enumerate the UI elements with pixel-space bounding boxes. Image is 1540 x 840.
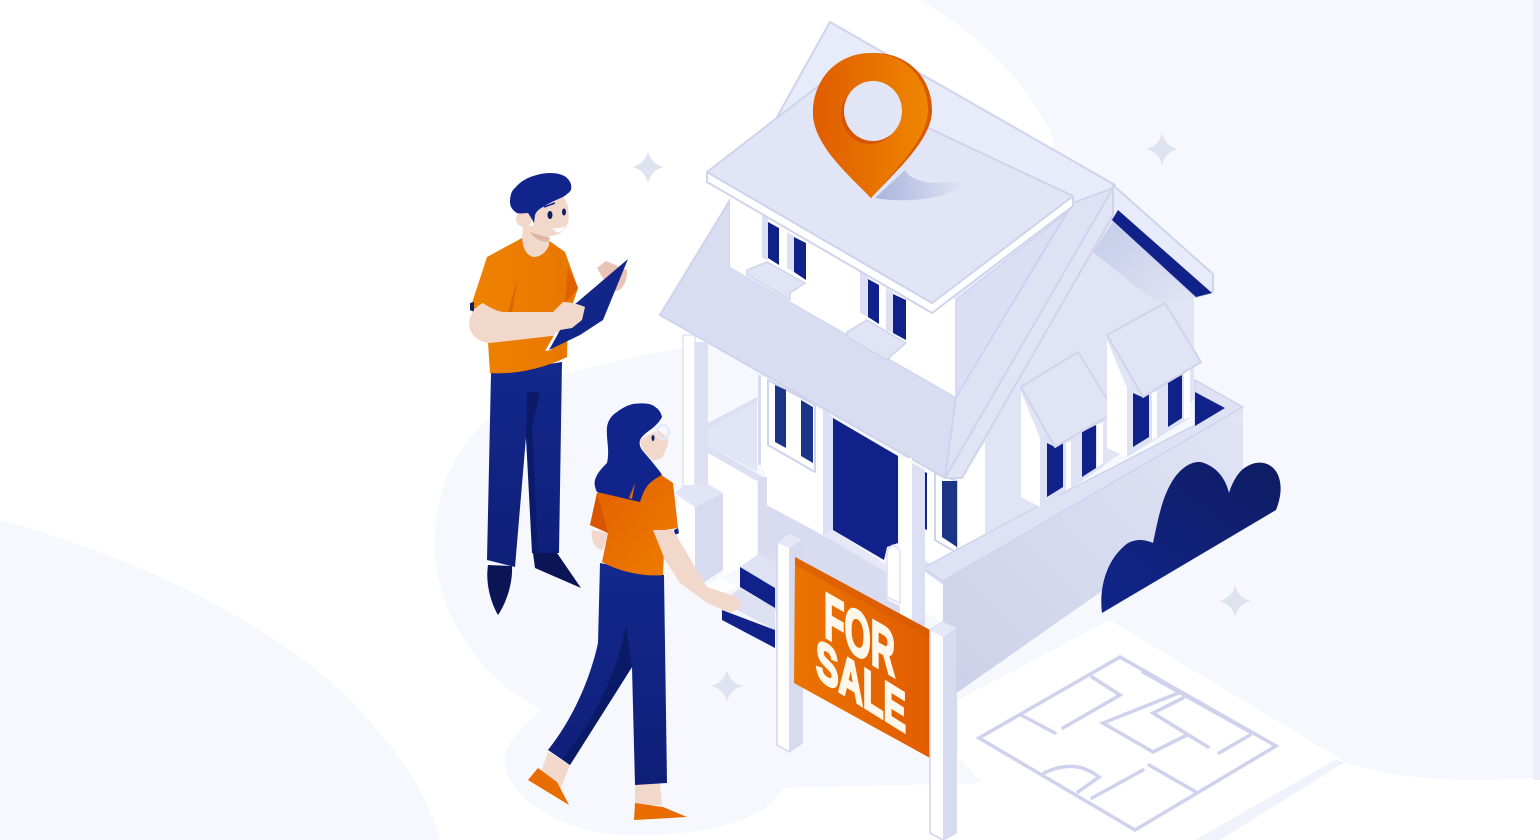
woman hair strand <box>629 483 635 499</box>
wall left strip <box>758 375 761 465</box>
man clipboard <box>549 259 628 350</box>
left dormer pane 1 <box>1047 443 1063 497</box>
man near hand <box>560 302 585 330</box>
pin hole <box>844 81 902 141</box>
navy gable strip <box>1112 210 1212 297</box>
background: right edge strip <box>1533 0 1540 780</box>
upper navy step <box>740 567 775 608</box>
sign text FOR: FOR <box>824 578 895 691</box>
house <box>660 22 1281 692</box>
window pane right <box>942 481 957 547</box>
lavender step <box>722 588 775 630</box>
man neck shadow <box>530 232 550 242</box>
man pants <box>487 362 562 567</box>
woman arm <box>653 530 742 613</box>
woman shirt <box>590 474 678 575</box>
upper wall right side <box>956 213 1066 397</box>
man far hand <box>597 261 627 291</box>
porch inner wall <box>708 402 757 472</box>
left dormer front <box>1040 410 1103 507</box>
right dormer roof <box>1107 303 1201 397</box>
door surround <box>823 405 833 535</box>
woman sleeve fold <box>590 493 608 533</box>
right of column white wall <box>925 442 985 572</box>
man hair <box>510 173 571 223</box>
pedestal right face <box>695 493 723 583</box>
sparkle: right <box>1219 585 1251 617</box>
woman hair <box>595 403 662 502</box>
porch lower white wall <box>708 453 757 577</box>
window sill 2 <box>847 320 906 360</box>
sign post left <box>777 533 802 752</box>
left dormer pane 2 <box>1082 425 1096 477</box>
main right roof slope <box>945 188 1113 478</box>
window frame left pair <box>768 380 815 472</box>
man face <box>533 197 569 236</box>
sparkle: upper left <box>632 151 664 183</box>
right dormer side white <box>1107 340 1127 457</box>
porch rail top <box>708 397 757 430</box>
door right column <box>900 458 912 620</box>
upper window navy 4 <box>893 294 906 340</box>
man sleeve shadow <box>565 267 578 303</box>
woman front shoe <box>634 803 687 820</box>
man with clipboard <box>469 173 628 615</box>
right dormer front <box>1127 362 1190 457</box>
sign text SALE: SALE <box>816 627 906 745</box>
pin body <box>813 53 928 198</box>
left porch column <box>683 335 695 498</box>
right dormer pane 1 <box>1133 393 1149 447</box>
door threshold <box>823 530 887 573</box>
woman glasses <box>657 425 669 439</box>
white floor step <box>705 577 738 593</box>
man pants shadow <box>526 392 540 555</box>
sign post right <box>930 622 956 840</box>
woman back arm <box>592 530 608 550</box>
man neck <box>522 225 550 257</box>
window frame right <box>935 473 957 553</box>
man ear <box>516 211 532 227</box>
window navy left pane <box>775 385 786 448</box>
man far shoe <box>533 553 581 588</box>
woman front foot <box>635 783 662 805</box>
base wall <box>943 407 1243 692</box>
roof edge strip <box>945 188 1113 478</box>
upper window frames <box>762 214 893 333</box>
left dormer white strips <box>1066 422 1103 490</box>
man shirt <box>472 238 578 373</box>
foundation <box>740 477 925 640</box>
front wall <box>760 375 826 537</box>
upper window navy 3 <box>868 279 879 324</box>
porch rail <box>708 445 763 481</box>
back gable roof <box>777 22 1115 360</box>
bush <box>1101 462 1281 613</box>
right dormer white strips <box>1152 370 1190 440</box>
pin inner shadow <box>841 84 899 144</box>
sparkle: upper right <box>1146 133 1178 165</box>
woman pants <box>548 563 667 785</box>
pin dark edge <box>813 53 932 198</box>
man brow <box>544 203 555 207</box>
upper window navy 1 <box>768 222 779 265</box>
door right column side <box>912 463 925 620</box>
upper roof edge <box>707 172 1073 313</box>
woman sleeve bit <box>674 528 679 535</box>
man smile <box>552 226 565 232</box>
window thin pane <box>925 472 927 530</box>
for sale sign <box>794 557 930 758</box>
gable underside shadow <box>1093 218 1194 303</box>
woman pants shadow <box>562 625 632 765</box>
background: bottom-left blob <box>0 520 440 840</box>
left dormer roof <box>1021 352 1115 447</box>
man shirt fold <box>508 277 518 312</box>
lavender top step <box>740 553 777 590</box>
lower navy step <box>722 610 775 648</box>
man arm back bit <box>470 302 474 312</box>
man clipboard white edge <box>545 332 560 351</box>
right dormer pane 2 <box>1168 375 1182 427</box>
base wall rim <box>923 380 1243 581</box>
woman back shoe <box>528 768 569 805</box>
door <box>833 418 898 560</box>
woman back foot <box>540 752 570 795</box>
location pin <box>813 53 966 200</box>
background: floor plan sheet shadow <box>1195 760 1345 840</box>
background: light blob behind house <box>435 0 1533 835</box>
main front roof <box>660 200 956 478</box>
man near shoe <box>487 565 512 615</box>
lower right strip <box>925 547 1000 585</box>
lower right white block <box>925 570 943 622</box>
man eye 2 <box>562 208 566 216</box>
window sill 1 <box>747 262 805 300</box>
window navy right pane <box>801 400 813 463</box>
left dormer side white <box>1021 392 1040 507</box>
upper roof top <box>707 80 1073 303</box>
man eye <box>548 211 552 219</box>
right wing wall <box>943 195 1194 582</box>
floor plan drawing <box>979 657 1276 830</box>
sparkle: lower left <box>711 670 743 702</box>
man arm <box>469 302 574 343</box>
woman eye <box>652 435 654 441</box>
right gable roof edge <box>1112 185 1213 297</box>
pedestal cap <box>675 485 723 507</box>
woman face <box>640 430 668 461</box>
upper window navy 2 <box>794 237 806 280</box>
pedestal left face <box>677 497 695 570</box>
pin shadow <box>875 170 966 200</box>
woman <box>528 403 742 820</box>
balcony navy triangle <box>1195 392 1225 426</box>
left porch column side <box>695 342 708 498</box>
upper floor wall <box>730 200 956 397</box>
short stair post <box>887 545 900 603</box>
